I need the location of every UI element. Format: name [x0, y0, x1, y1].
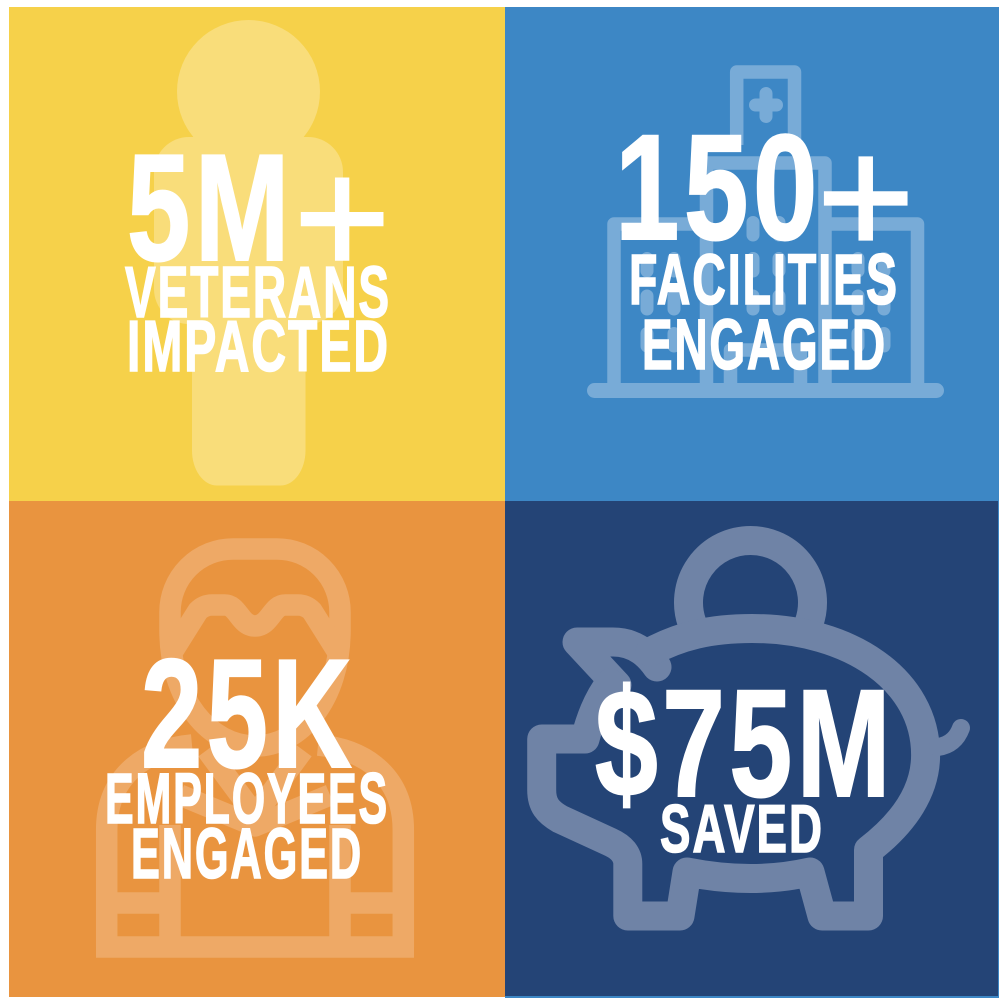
icon: person — [154, 20, 343, 486]
panel: employees — [9, 501, 505, 997]
icon: employee — [96, 549, 414, 947]
stat: 5M+: 5M — [127, 123, 294, 293]
panel: facilities — [505, 7, 999, 501]
label: facilities engaged — [629, 241, 899, 385]
label: employees engaged — [105, 760, 389, 894]
label: saved: SAVED — [660, 791, 824, 867]
stat: 150+: + — [817, 104, 915, 290]
label: employees engaged: EMPLOYEES — [105, 760, 389, 839]
stat: 150+: 150 — [615, 103, 822, 271]
panel: savings — [505, 501, 999, 998]
label: veterans impacted — [125, 253, 391, 387]
stat: $75M: $75M — [595, 658, 895, 829]
panel: veterans — [9, 7, 505, 501]
icon: hospital — [594, 72, 936, 390]
label: employees engaged: ENGAGED — [131, 815, 363, 894]
stat: 5M+: + — [294, 125, 390, 309]
stat: 25K: 25K — [141, 627, 356, 800]
label: veterans impacted: IMPACTED — [127, 307, 390, 387]
label: veterans impacted: VETERANS — [125, 253, 391, 333]
icon: piggy bank — [542, 540, 961, 916]
